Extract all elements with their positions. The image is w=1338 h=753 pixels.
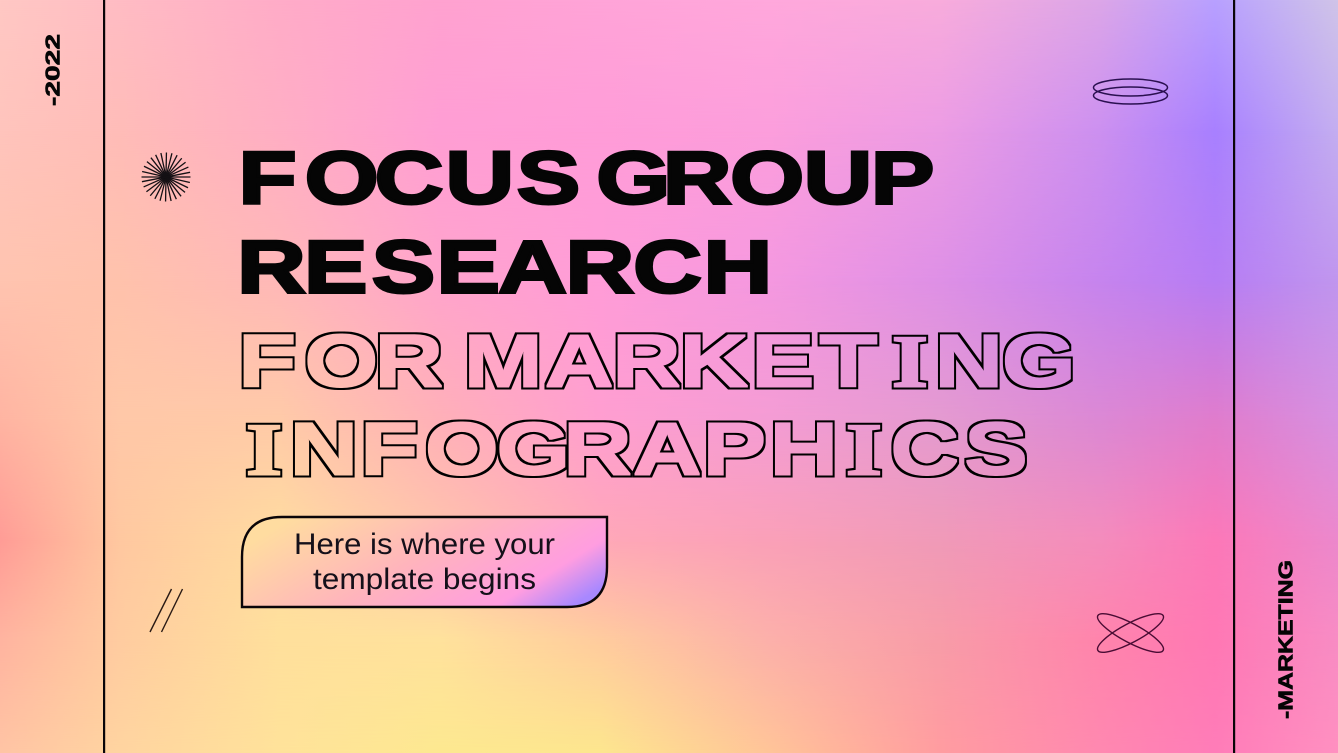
icon: stacked rings	[1094, 79, 1168, 104]
title line: for marketing outlined: I	[892, 321, 928, 403]
right vertical rule	[1233, 0, 1235, 753]
title line: infographics outlined: I	[845, 409, 882, 491]
title line: infographics outlined: I	[246, 409, 282, 491]
title line: for marketing outlined: NG	[935, 320, 1076, 403]
title line: infographics outlined: NFOGRAPH	[290, 408, 838, 491]
icon: double slash	[150, 589, 182, 632]
icon: crossed orbits	[1093, 607, 1168, 659]
title line: infographics outlined: CS	[890, 408, 1028, 491]
title line: for marketing outlined: FOR MARKET	[238, 320, 877, 403]
title line: focus group: FOCUS GROUP	[239, 137, 934, 220]
icon: starburst	[142, 153, 190, 201]
title line: research: RESEARCH	[237, 226, 772, 309]
side label: 2022: -2022	[42, 34, 64, 106]
side label: marketing: -MARKETING	[1276, 560, 1298, 719]
left vertical rule	[103, 0, 105, 753]
subtitle pill: template begins	[313, 563, 536, 596]
subtitle pill	[242, 517, 607, 607]
subtitle pill: Here is where your	[294, 528, 555, 561]
